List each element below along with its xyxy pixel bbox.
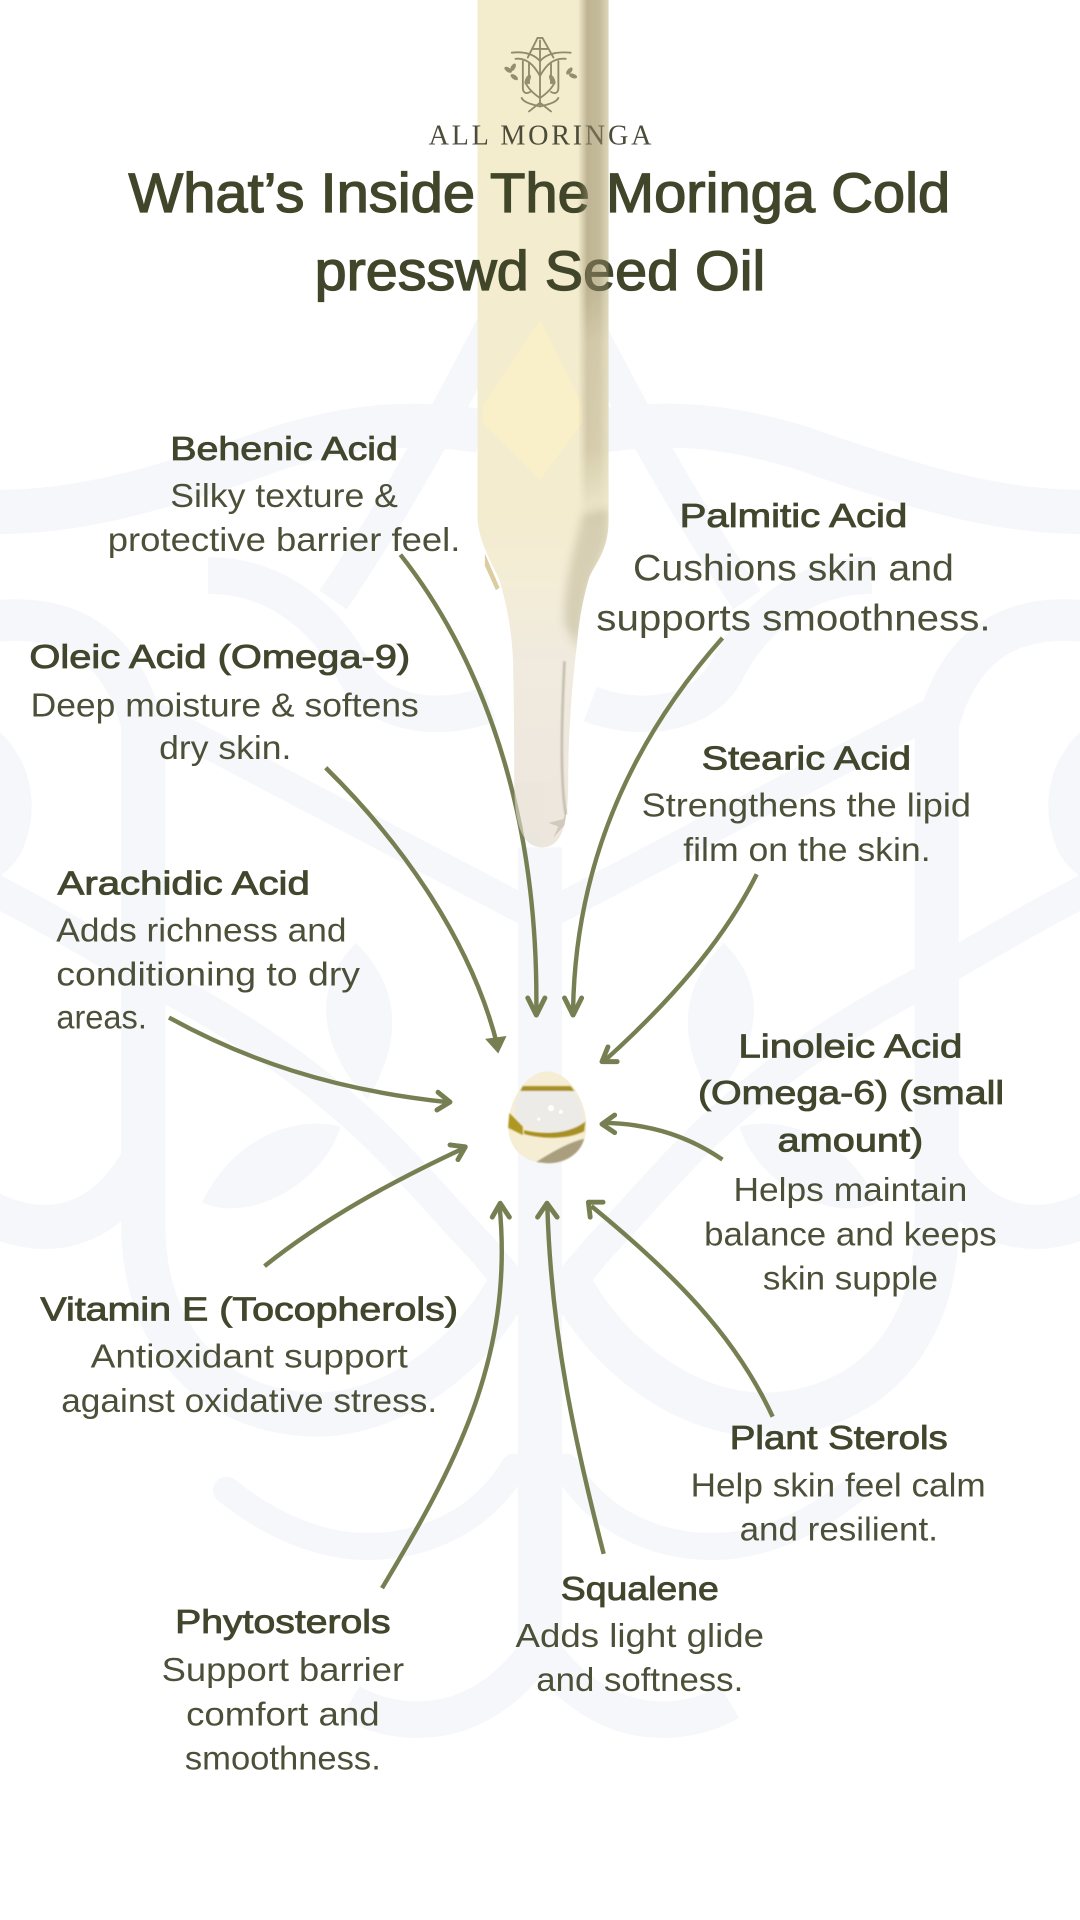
background: faint monogram watermark [0,306,1080,1720]
ingredient: Squalene: Adds light glide [516,1618,764,1655]
arrow: Arachidic Acid to drop [169,1018,450,1110]
ingredient: Oleic Acid: dry skin. [159,730,291,767]
ingredient: Vitamin E: Vitamin E (Tocopherols) [40,1292,458,1329]
ingredient: Arachidic Acid: Arachidic Acid [58,865,310,902]
ingredient: Linoleic Acid [698,1028,1004,1297]
ingredient: Vitamin E: Antioxidant support [91,1339,408,1376]
arrow: Linoleic Acid to drop [602,1115,722,1160]
ingredient: Linoleic Acid: (Omega-6) (small [698,1075,1004,1112]
arrow: Plant Sterols to drop [588,1202,773,1417]
ingredient: Phytosterols: Support barrier [162,1652,404,1689]
ingredient: Phytosterols: comfort and [186,1696,380,1733]
ingredient: Vitamin E: against oxidative stress. [61,1383,437,1420]
arrow: Behenic Acid to drop [400,555,545,1015]
ingredient: Phytosterols: Phytosterols [175,1604,391,1641]
ingredient: Linoleic Acid: skin supple [763,1260,938,1297]
dropper with oil [478,0,609,847]
title [129,161,950,302]
ingredient: Linoleic Acid: amount) [778,1123,923,1160]
ingredient: Arachidic Acid: areas. [56,1000,147,1037]
ingredient: Squalene: and softness. [536,1662,743,1699]
ingredient: Linoleic Acid: Helps maintain [733,1172,967,1209]
arrow: Phytosterols to drop [382,1203,509,1588]
ingredient: Plant Sterols: Help skin feel calm [691,1467,986,1504]
dropper side shadow [578,0,609,527]
dropper tip overlay on arrow [514,784,545,847]
ingredient: Plant Sterols [691,1420,986,1548]
ingredient: Phytosterols [162,1604,404,1777]
ingredient: Arachidic Acid: conditioning to dry [56,957,361,994]
ingredient: Arachidic Acid: Adds richness and [56,913,347,950]
ingredient: Palmitic Acid [596,498,991,639]
brand name: ALL MORINGA [429,120,652,151]
ingredient: Palmitic Acid: supports smoothness. [596,598,991,639]
ingredient: Behenic Acid: Behenic Acid [170,431,398,468]
arrow: Vitamin E to drop [264,1145,465,1266]
ingredient: Plant Sterols: Plant Sterols [730,1420,948,1457]
ingredient: Stearic Acid: Stearic Acid [702,741,911,778]
ingredient: Oleic Acid: Deep moisture & softens [31,687,419,724]
ingredient: Squalene: Squalene [561,1571,719,1608]
ingredient: Stearic Acid [642,741,971,869]
title: What’s Inside The Moringa Cold [129,161,950,224]
ingredient: Squalene [516,1571,764,1699]
ingredient: Behenic Acid: protective barrier feel. [108,522,460,559]
ingredient: Linoleic Acid: balance and keeps [704,1216,997,1253]
ingredient: Behenic Acid: Silky texture & [170,478,398,515]
ingredient: Linoleic Acid: Linoleic Acid [738,1028,962,1065]
ingredient: Palmitic Acid: Palmitic Acid [680,498,907,535]
ingredient: Stearic Acid: film on the skin. [683,832,931,869]
ingredient: Plant Sterols: and resilient. [740,1511,938,1548]
ingredient: Oleic Acid: Oleic Acid (Omega-9) [29,639,410,676]
arrow: Squalene to drop [538,1203,604,1554]
arrow: Oleic Acid to drop [326,768,505,1052]
ingredient: Oleic Acid [29,639,419,767]
ingredient: Palmitic Acid: Cushions skin and [633,547,954,588]
arrow: Stearic Acid to drop [602,874,757,1062]
ingredient: Behenic Acid [108,431,460,559]
oil drop [508,1071,587,1163]
title: presswd Seed Oil [315,239,765,302]
ingredient: Phytosterols: smoothness. [185,1740,381,1777]
ingredient: Arachidic Acid [56,865,361,1037]
ingredient: Vitamin E [40,1292,458,1420]
ingredient: Stearic Acid: Strengthens the lipid [642,788,971,825]
brand logo: All Moringa monogram [503,38,578,111]
arrow: Palmitic Acid to drop [564,638,722,1015]
